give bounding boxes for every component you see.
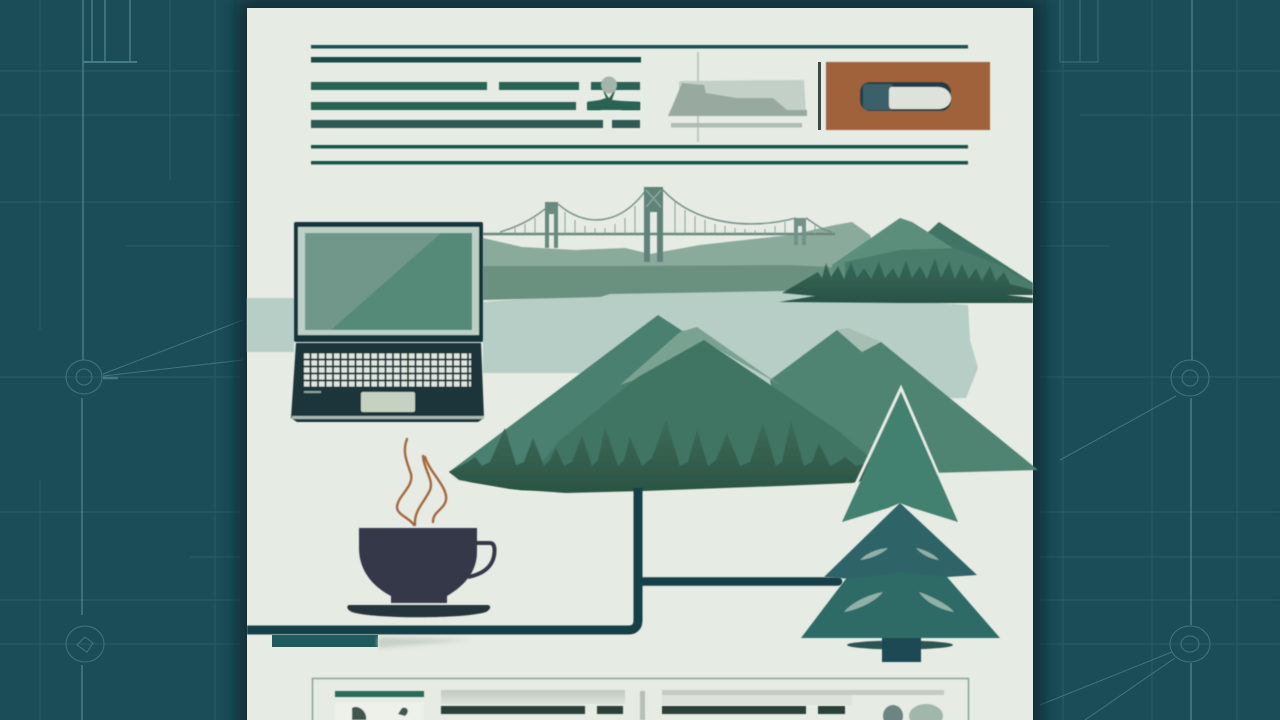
illustration: suspension bridge xyxy=(483,187,880,300)
icon: header figure xyxy=(587,76,640,110)
steam xyxy=(397,439,446,525)
paper shadow xyxy=(237,0,1043,720)
left mountain xyxy=(449,315,700,490)
panel: water band xyxy=(247,291,978,400)
header: vertical divider xyxy=(818,62,821,130)
shore strip xyxy=(483,265,850,300)
left column xyxy=(335,691,424,697)
keyboard xyxy=(304,356,471,384)
cup body xyxy=(359,528,477,603)
illustration: pine tree xyxy=(801,388,1000,662)
back right mountain xyxy=(770,328,1038,475)
white outline xyxy=(856,388,938,484)
connector pipes xyxy=(247,488,838,630)
divider xyxy=(640,691,645,720)
middle column xyxy=(441,690,625,704)
needle highlights xyxy=(844,548,954,612)
base xyxy=(291,343,484,422)
icon: right node top xyxy=(1060,360,1209,460)
icon: left node bottom xyxy=(66,626,104,662)
trunk xyxy=(882,638,921,662)
icon: left node top xyxy=(66,320,243,394)
towers xyxy=(644,187,663,262)
icon: header landscape thumbnail xyxy=(668,52,807,142)
illustration: central mountains xyxy=(449,315,1038,493)
panel: paper sheet xyxy=(247,8,1033,720)
stub shadow xyxy=(378,637,470,648)
saucer xyxy=(347,605,490,617)
illustration: island with mountains xyxy=(779,218,1033,303)
forest silhouette xyxy=(449,420,880,493)
keyboard label xyxy=(304,391,321,393)
handle xyxy=(468,543,495,577)
screen xyxy=(294,222,483,342)
trackpad xyxy=(361,392,415,412)
ground ellipse xyxy=(847,640,953,650)
icon: right node bottom xyxy=(1040,626,1210,720)
light ridge xyxy=(620,327,780,385)
right column xyxy=(662,690,944,695)
header: text lines xyxy=(311,45,968,164)
front mountain xyxy=(520,340,878,490)
icon: toggle pill xyxy=(860,82,951,111)
panel: brown callout xyxy=(826,62,990,130)
bottom tier xyxy=(801,520,1000,638)
illustration: coffee cup xyxy=(347,439,495,617)
middle tier xyxy=(824,503,977,579)
panel: bottom summary xyxy=(312,678,968,720)
connector stub xyxy=(272,635,378,647)
distant hills xyxy=(483,222,880,270)
illustration: laptop xyxy=(291,222,484,422)
top tier xyxy=(842,392,958,522)
icon: small leaves xyxy=(352,707,408,720)
icon: apples xyxy=(883,705,903,720)
